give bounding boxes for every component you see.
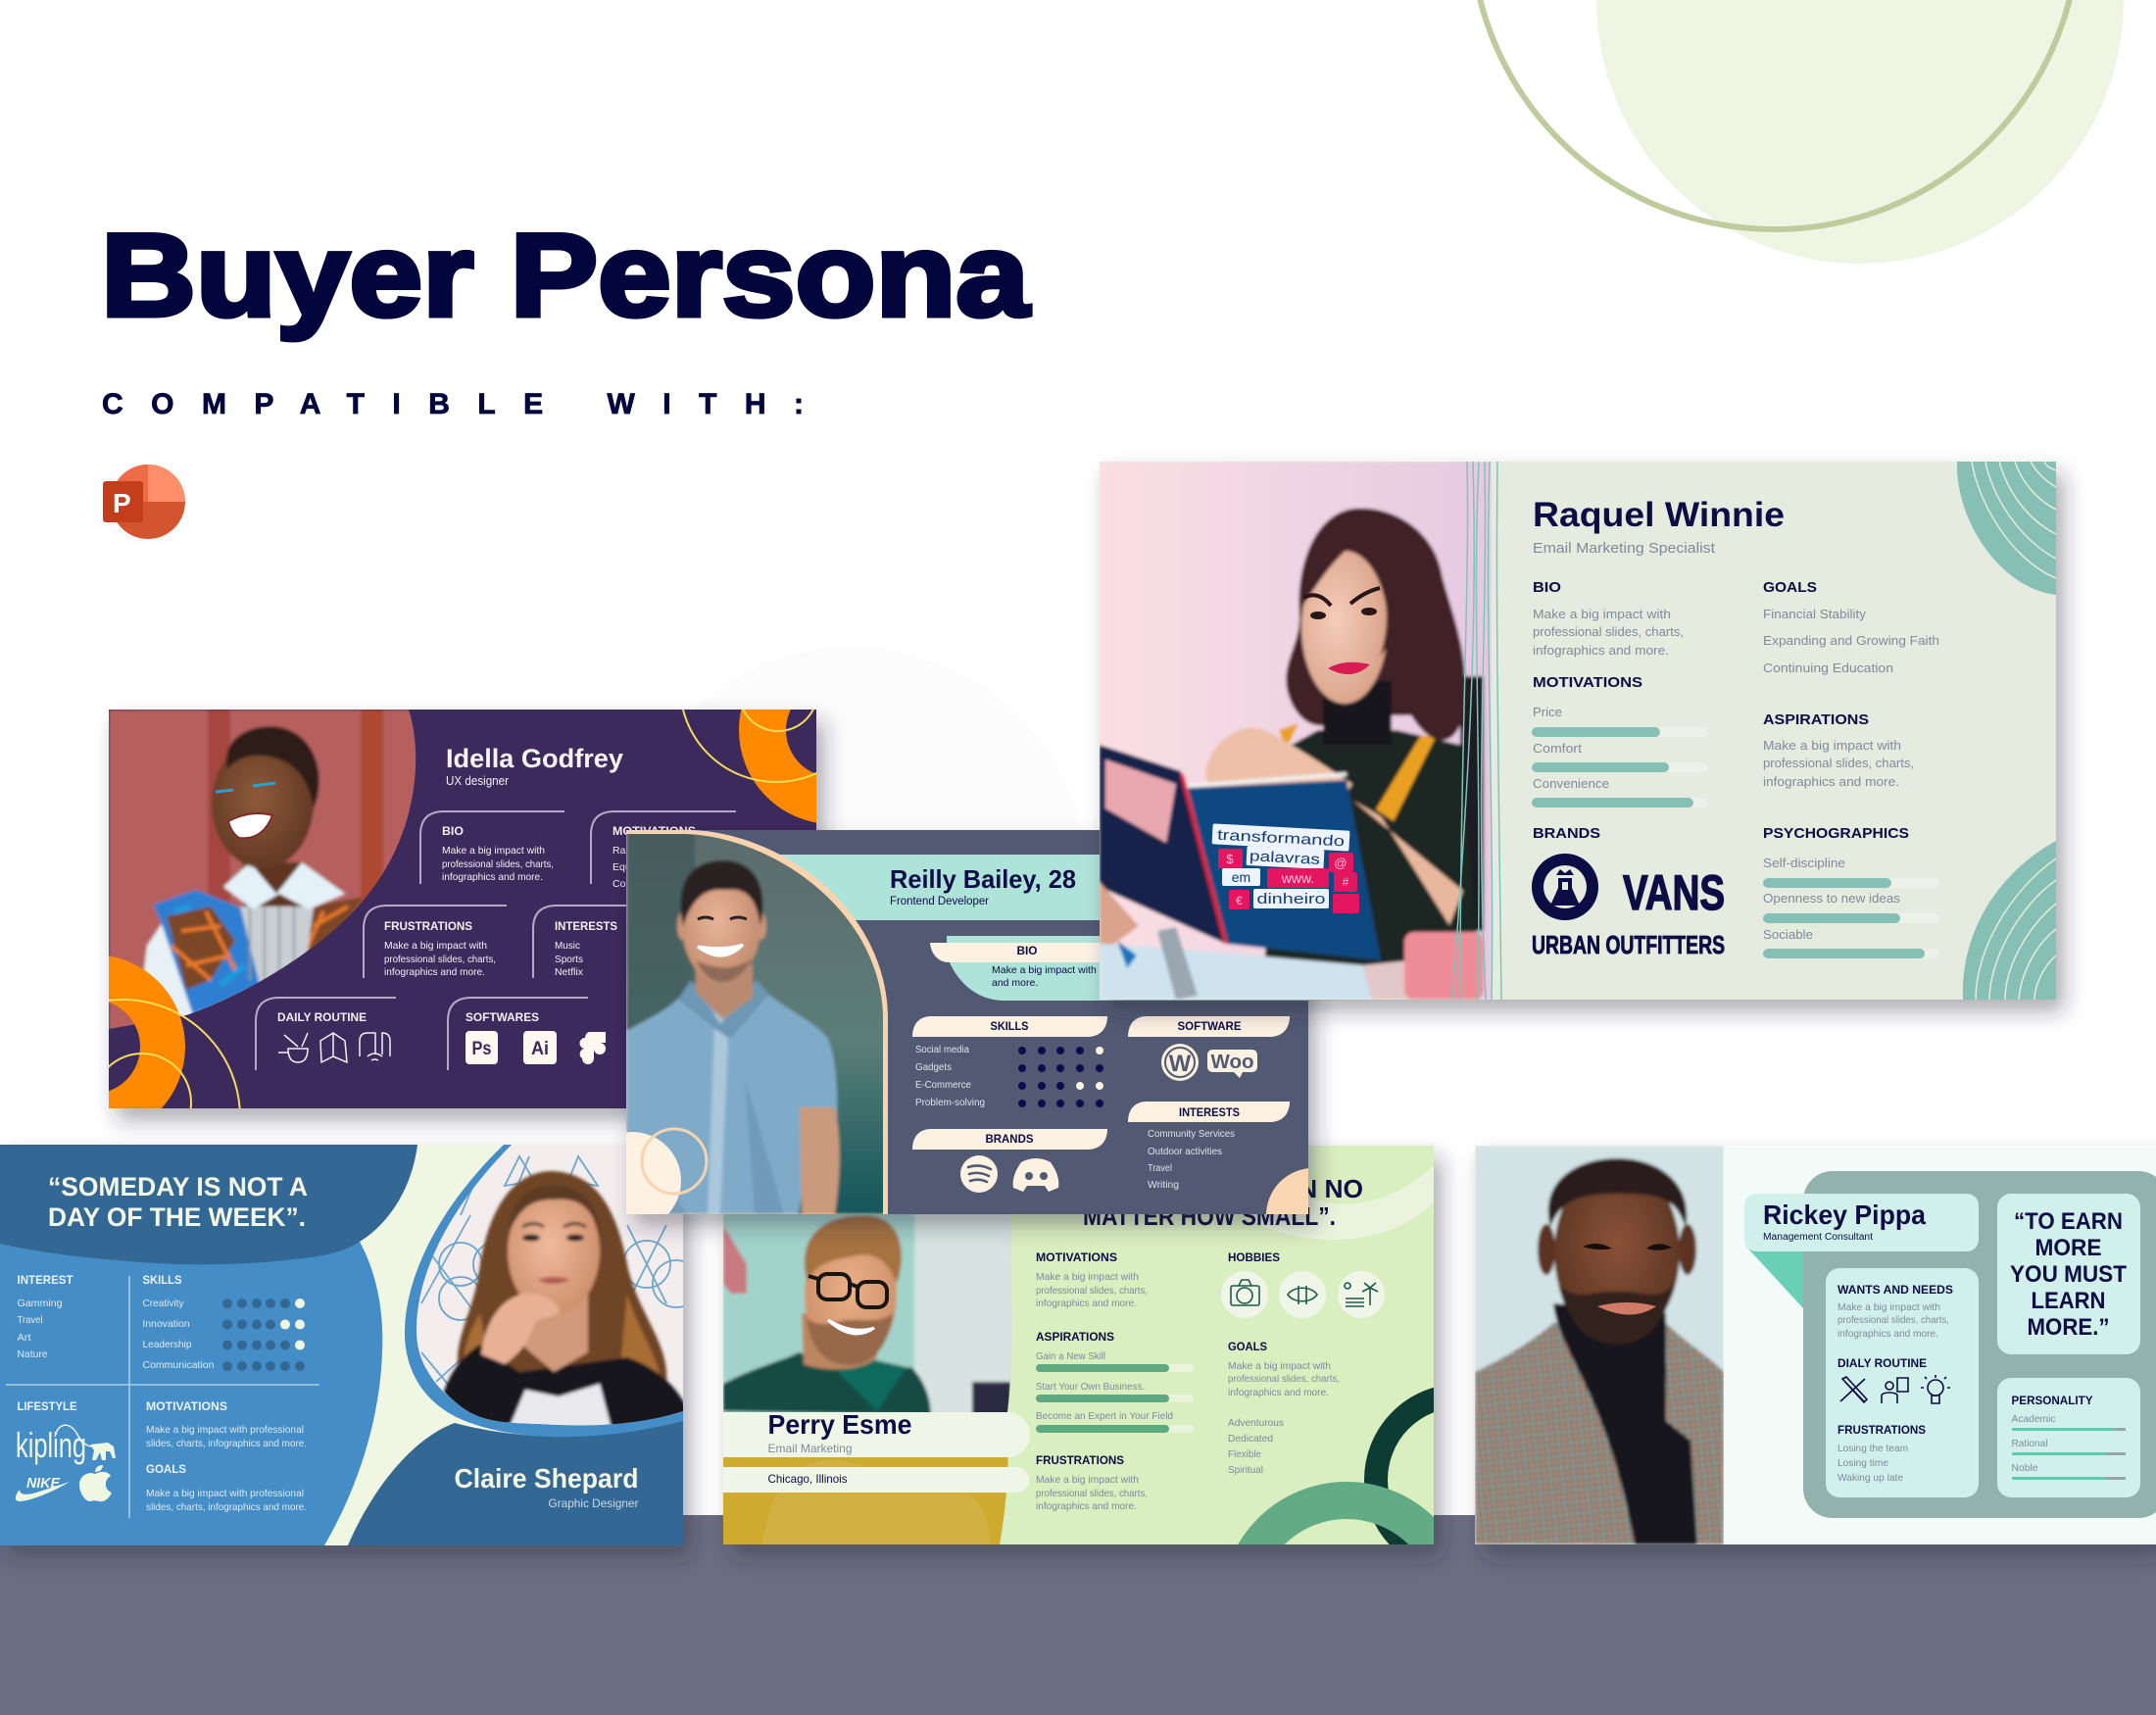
skills: E-Commerce (915, 1080, 971, 1091)
interest list (18, 1273, 74, 1360)
bio (1533, 579, 1684, 658)
name: UX designer (446, 774, 509, 788)
location pill: Chicago, Illinois (768, 1472, 847, 1486)
bio: BIO (1017, 946, 1038, 957)
hobbies icons (1221, 1250, 1385, 1318)
name: Idella Godfrey (446, 744, 623, 773)
goals: Continuing Education (1763, 661, 1893, 675)
goals: Spiritual (1228, 1464, 1263, 1476)
wants card: Losing the team (1838, 1443, 1908, 1454)
aspirations: ASPIRATIONS (1763, 711, 1869, 728)
name pill: Email Marketing (768, 1442, 853, 1455)
book labels: € (1236, 894, 1243, 907)
icon: PowerPoint: P (113, 488, 131, 518)
name: Email Marketing Specialist (1533, 540, 1716, 557)
photo: Idella (109, 710, 432, 1033)
bio (930, 936, 1308, 1001)
frustrations (384, 919, 496, 978)
aspirations bars: Gain a New Skill (1036, 1350, 1105, 1362)
interests: Netflix (555, 966, 584, 978)
motivations: MOTIVATIONS (1036, 1250, 1117, 1264)
name pill (723, 1409, 1030, 1457)
motivations bars: MOTIVATIONS (1533, 674, 1642, 691)
wants card: Losing time (1838, 1457, 1888, 1469)
quote: MATTER HOW SMALL”. (1083, 1201, 1336, 1231)
name pill: Perry Esme (768, 1409, 911, 1440)
quote card: LEARN (2031, 1288, 2105, 1314)
name card: Management Consultant (1763, 1232, 1873, 1243)
motivations and goals: slides, charts, infographics and more. (146, 1501, 307, 1513)
mint banner (764, 855, 1308, 920)
book labels: @ (1334, 856, 1348, 870)
softwares: Ai (531, 1039, 549, 1059)
interests: Community Services (1148, 1129, 1235, 1140)
wants card: WANTS AND NEEDS (1838, 1283, 1953, 1297)
bio: Make a big impact with (1533, 607, 1671, 621)
goals (1228, 1340, 1340, 1476)
skills: Social media (915, 1045, 969, 1055)
bio: Make a big impact with (442, 845, 545, 857)
book labels: em (1232, 869, 1250, 885)
interests (1128, 1102, 1290, 1191)
frustrations: professional slides, charts, (1036, 1488, 1148, 1499)
aspirations bars: ASPIRATIONS (1036, 1330, 1114, 1344)
skills (143, 1273, 305, 1371)
skills: Communication (143, 1359, 215, 1371)
aspirations: infographics and more. (1763, 774, 1899, 789)
book labels: transformando (1217, 827, 1345, 850)
software: Woo (1211, 1052, 1254, 1073)
frustrations (1036, 1453, 1148, 1512)
photo: Claire (412, 1145, 700, 1431)
aspirations (1763, 711, 1914, 789)
personality card (1997, 1378, 2140, 1497)
interests: Sports (555, 954, 583, 965)
icon: PowerPoint (103, 465, 185, 539)
interests (555, 919, 617, 978)
card: Perry Esme (717, 1144, 1455, 1565)
brands (912, 1129, 1107, 1193)
wants card: DIALY ROUTINE (1838, 1356, 1927, 1370)
quote: DAY OF THE WEEK”. (48, 1202, 306, 1232)
skills: Problem-solving (915, 1098, 985, 1108)
softwares (466, 1010, 606, 1064)
photo: Perry (723, 1214, 1012, 1412)
psychographics bars: Sociable (1763, 927, 1813, 942)
goals: Expanding and Growing Faith (1763, 633, 1939, 648)
goals: Dedicated (1228, 1433, 1273, 1445)
personality card: Noble (2011, 1462, 2038, 1474)
quote card (1997, 1194, 2140, 1354)
motivations and goals: Make a big impact with professional (146, 1424, 304, 1436)
name (1533, 496, 1785, 557)
wavy lines (1452, 462, 1501, 1000)
lifestyle logos (16, 1399, 116, 1501)
hobbies icons: HOBBIES (1228, 1250, 1280, 1264)
goals: professional slides, charts, (1228, 1373, 1340, 1385)
goals: GOALS (1228, 1340, 1267, 1353)
card: Raquel Winnie (1100, 462, 2056, 1000)
motivations bars: Price (1533, 705, 1562, 719)
goals: infographics and more. (1228, 1387, 1329, 1398)
peach arch (626, 830, 888, 1214)
software (1128, 1016, 1290, 1081)
interests: Writing (1148, 1180, 1179, 1191)
psychographics bars: Self-discipline (1763, 856, 1845, 870)
personality card: Rational (2011, 1438, 2048, 1449)
interest list: Gamming (18, 1298, 63, 1309)
interest list: Art (18, 1332, 31, 1344)
quote: “SOMEDAY IS NOT A (48, 1172, 308, 1201)
quote (49, 1177, 308, 1227)
aspirations bars (1036, 1330, 1194, 1433)
frustrations: professional slides, charts, (384, 954, 496, 965)
quote card: MORE (2034, 1235, 2101, 1261)
book labels: $ (1226, 852, 1234, 866)
motivations: Equality (612, 861, 650, 873)
skills: SKILLS (143, 1273, 182, 1287)
goals (1763, 579, 1939, 675)
gold panel (723, 1411, 1008, 1544)
skills: Leadership (143, 1339, 192, 1350)
name: Reilly Bailey, 28 (890, 864, 1076, 894)
psychographics bars: PSYCHOGRAPHICS (1763, 825, 1909, 842)
aspirations bars: Start Your Own Business. (1036, 1381, 1145, 1393)
motivations: Make a big impact with (1036, 1271, 1139, 1283)
name: Frontend Developer (890, 896, 989, 907)
name (890, 864, 1076, 907)
aspirations: professional slides, charts, (1763, 756, 1914, 770)
bio: BIO (442, 824, 464, 838)
daily routine (277, 1010, 390, 1062)
lifestyle logos: LIFESTYLE (18, 1399, 76, 1413)
bio: and more. (992, 977, 1038, 989)
interests: Music (555, 940, 580, 952)
name: Claire Shepard (455, 1463, 639, 1494)
skills: Innovation (143, 1318, 190, 1330)
dark panel (1803, 1171, 2156, 1518)
skills: Creativity (143, 1298, 184, 1309)
lifestyle logos: kipling (16, 1425, 86, 1465)
interest list: Nature (18, 1348, 48, 1360)
skills: Gadgets (915, 1062, 952, 1073)
psychographics bars (1763, 825, 1939, 958)
wants card: infographics and more. (1838, 1328, 1938, 1340)
brands: VANS (1623, 865, 1725, 920)
blob border (405, 1145, 683, 1437)
motivations and goals (146, 1399, 307, 1513)
aspirations: Make a big impact with (1763, 738, 1901, 753)
brands (1532, 825, 1725, 959)
leaf: top right (1957, 462, 2056, 595)
name (446, 744, 623, 788)
bio (442, 824, 554, 883)
goals: GOALS (1763, 579, 1817, 596)
brands: URBAN OUTFITTERS (1532, 930, 1725, 959)
frustrations: FRUSTRATIONS (384, 919, 472, 933)
quote: TAKE ACTION NO (1144, 1174, 1363, 1203)
interest list: Travel (18, 1314, 43, 1326)
motivations: MOTIVATIONS (612, 824, 696, 838)
card: Idella Godfrey (5, 590, 904, 1235)
softwares: Ps (472, 1039, 492, 1059)
motivations: professional slides, charts, (1036, 1285, 1148, 1297)
aspirations bars: Become an Expert in Your Field (1036, 1410, 1173, 1422)
motivations and goals: GOALS (146, 1462, 186, 1476)
motivations: infographics and more. (1036, 1298, 1137, 1309)
wants card: Make a big impact with (1838, 1301, 1940, 1313)
motivations and goals: slides, charts, infographics and more. (146, 1438, 307, 1449)
motivations: Consistency (612, 878, 669, 890)
card: Claire Shepard (0, 1145, 700, 1545)
book labels: # (1343, 875, 1349, 889)
lifestyle logos: NIKE (26, 1475, 61, 1492)
photo: Rickey (1475, 1146, 1724, 1544)
bio: infographics and more. (1533, 643, 1669, 658)
mid blue panel (0, 1241, 382, 1545)
motivations (612, 824, 696, 890)
daily routine: DAILY ROUTINE (277, 1010, 367, 1024)
goals: Flexible (1228, 1448, 1261, 1460)
goals: Make a big impact with (1228, 1360, 1331, 1372)
wants card: Waking up late (1838, 1472, 1903, 1484)
brands: BRANDS (1533, 825, 1600, 842)
interest list: INTEREST (18, 1273, 74, 1287)
cream circle and ring (583, 1129, 707, 1230)
name card: Rickey Pippa (1763, 1200, 1926, 1230)
motivations and goals: MOTIVATIONS (146, 1399, 227, 1413)
wants card: FRUSTRATIONS (1838, 1423, 1926, 1437)
goals: Adventurous (1228, 1417, 1284, 1429)
motivations and goals: Make a big impact with professional (146, 1488, 304, 1499)
book labels: dinheiro (1256, 891, 1325, 907)
goals: Financial Stability (1763, 607, 1867, 621)
interests: INTERESTS (555, 919, 617, 933)
motivations bars: Convenience (1533, 776, 1609, 791)
book labels: www. (1281, 870, 1314, 886)
bio: infographics and more. (442, 871, 543, 883)
name: Graphic Designer (549, 1496, 639, 1510)
frustrations: FRUSTRATIONS (1036, 1453, 1124, 1467)
card: Rickey Pippa (1475, 1146, 2156, 1544)
photo: Raquel (1100, 462, 1492, 1000)
motivations: Rational (612, 845, 651, 857)
name card (1744, 1194, 1979, 1251)
quote card: MORE.” (2027, 1314, 2109, 1341)
subtitle: COMPATIBLE WITH: (102, 388, 804, 420)
bio: professional slides, charts, (442, 858, 554, 870)
motivations (1036, 1250, 1148, 1309)
software: W (1169, 1051, 1192, 1077)
quote (1084, 1180, 1362, 1225)
book labels: palavras (1250, 848, 1320, 868)
brands: BRANDS (986, 1134, 1034, 1146)
quote card: “TO EARN (2014, 1208, 2123, 1235)
book labels (1212, 823, 1359, 913)
wants card: professional slides, charts, (1838, 1314, 1949, 1326)
leaf: bottom right (1963, 841, 2056, 1000)
name (455, 1468, 639, 1509)
personality card: PERSONALITY (2011, 1394, 2093, 1407)
dark quote blob (0, 1145, 417, 1264)
photo: Reilly (626, 830, 891, 1214)
skills: SKILLS (990, 1021, 1029, 1033)
location pill (723, 1467, 1029, 1493)
softwares: SOFTWARES (466, 1010, 539, 1024)
motivations bars (1532, 674, 1708, 808)
skills (912, 1016, 1107, 1108)
personality card: Academic (2011, 1413, 2056, 1425)
name: Raquel Winnie (1533, 496, 1785, 534)
software: SOFTWARE (1178, 1021, 1242, 1033)
frustrations: infographics and more. (1036, 1500, 1137, 1512)
title: Buyer Persona (101, 210, 1030, 341)
bio: professional slides, charts, (1533, 624, 1684, 639)
bio: Make a big impact with professional (992, 964, 1154, 976)
interests: INTERESTS (1179, 1107, 1240, 1119)
motivations bars: Comfort (1533, 741, 1582, 756)
interests: Travel (1148, 1163, 1172, 1174)
frustrations: infographics and more. (384, 966, 485, 978)
wants card (1826, 1268, 1979, 1497)
quote card: YOU MUST (2010, 1261, 2127, 1288)
name tag accent (1746, 1247, 1803, 1308)
card: Reilly Bailey (583, 830, 1360, 1262)
interests: Outdoor activities (1148, 1147, 1222, 1157)
frustrations: Make a big impact with (1036, 1474, 1139, 1486)
decorative arc (1239, 1165, 1434, 1240)
psychographics bars: Openness to new ideas (1763, 891, 1901, 906)
orange rings (5, 590, 904, 1235)
frustrations: Make a big impact with (384, 940, 487, 952)
bio: BIO (1533, 579, 1561, 596)
dark name blob (348, 1419, 683, 1545)
